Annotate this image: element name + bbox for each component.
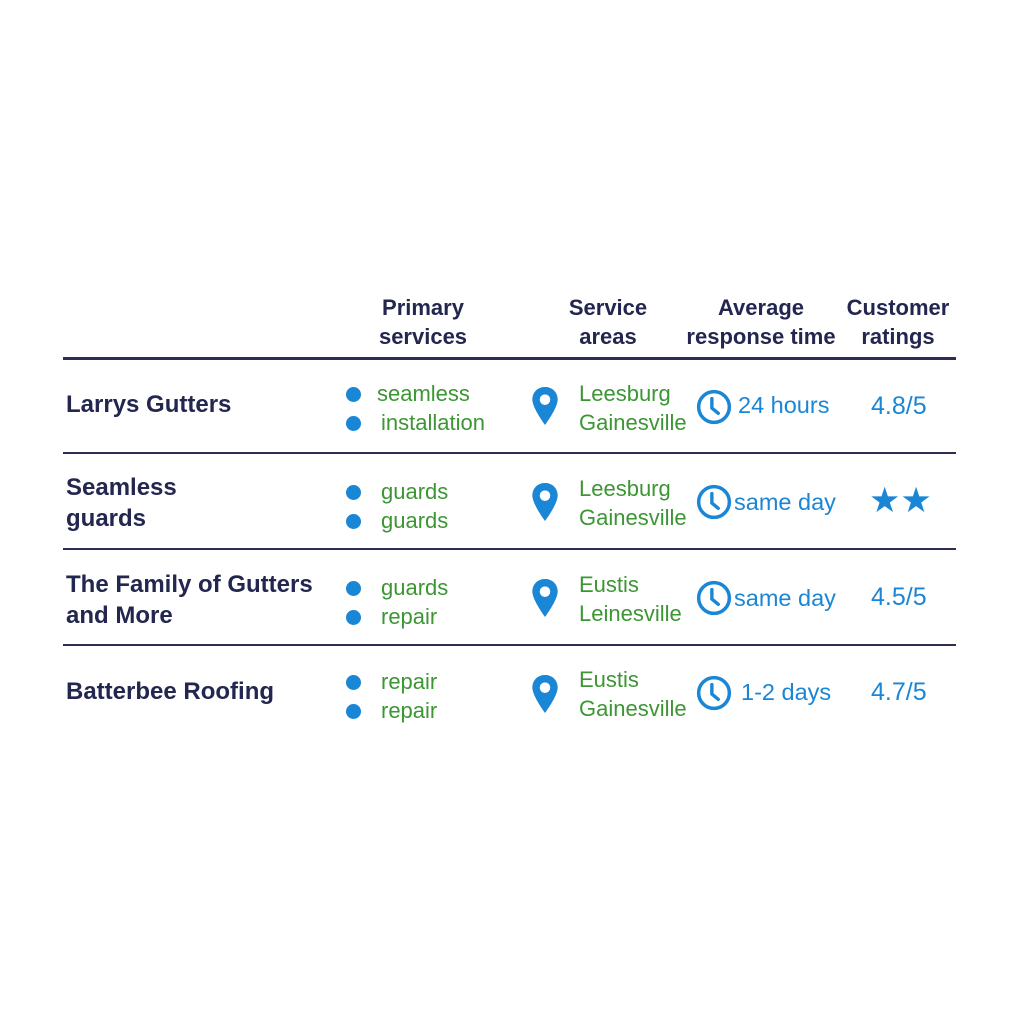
areas: Leinesville (579, 601, 682, 626)
services (346, 669, 437, 723)
company name: The Family of Gutters (66, 571, 313, 598)
services: seamless (377, 381, 470, 406)
row 2 (66, 474, 932, 533)
company name (66, 474, 177, 532)
services (346, 381, 485, 435)
areas: Eustis (579, 572, 639, 597)
services (346, 479, 448, 533)
areas: Leesburg (579, 476, 671, 501)
rating: 4.7/5 (871, 678, 927, 706)
icon: clock (696, 484, 732, 520)
icon: clock (696, 390, 732, 424)
services: guards (381, 479, 448, 504)
header: ratings: Customer (847, 295, 949, 320)
icon: pin (532, 483, 558, 521)
rating: 4.8/5 (871, 392, 927, 420)
header row (379, 295, 949, 349)
header: primary services: Primary (382, 295, 464, 320)
areas (579, 476, 687, 530)
services: repair (381, 669, 437, 694)
row 3 (66, 571, 927, 629)
services: repair (381, 604, 437, 629)
response time: same day (734, 489, 836, 515)
rating stars: ★★ (869, 481, 932, 520)
header: ratings: ratings (861, 324, 935, 349)
areas (579, 381, 687, 435)
header: service areas (569, 295, 647, 349)
icon: clock (696, 676, 732, 710)
company name: Larrys Gutters (66, 391, 231, 418)
company name: guards (66, 505, 146, 532)
areas: Gainesville (579, 696, 687, 721)
company name: and More (66, 602, 173, 629)
company name (66, 571, 313, 629)
header: response time: response time (686, 324, 836, 349)
row 4 (66, 667, 927, 723)
header: response time (686, 295, 836, 349)
services: repair (381, 698, 437, 723)
row 1 (66, 381, 927, 435)
response time: 24 hours (738, 392, 829, 418)
header: service areas: areas (579, 324, 637, 349)
icon: pin (532, 387, 558, 425)
response time: same day (734, 585, 836, 611)
services: guards (381, 575, 448, 600)
areas: Gainesville (579, 410, 687, 435)
services: guards (381, 508, 448, 533)
response time: 1-2 days (741, 679, 831, 705)
areas: Leesburg (579, 381, 671, 406)
areas (579, 572, 682, 626)
header: primary services: services (379, 324, 467, 349)
company name: Batterbee Roofing (66, 678, 274, 705)
services: installation (381, 410, 485, 435)
icon: pin (532, 579, 558, 617)
header: service areas: Service (569, 295, 647, 320)
icon: pin (532, 675, 558, 713)
company name: Seamless (66, 474, 177, 501)
areas: Gainesville (579, 505, 687, 530)
rating: 4.5/5 (871, 583, 927, 611)
header: primary services (379, 295, 467, 349)
icon: clock (696, 580, 732, 616)
header: response time: Average (718, 295, 804, 320)
header: ratings (847, 295, 949, 349)
areas: Eustis (579, 667, 639, 692)
areas (579, 667, 687, 721)
services (346, 575, 448, 629)
